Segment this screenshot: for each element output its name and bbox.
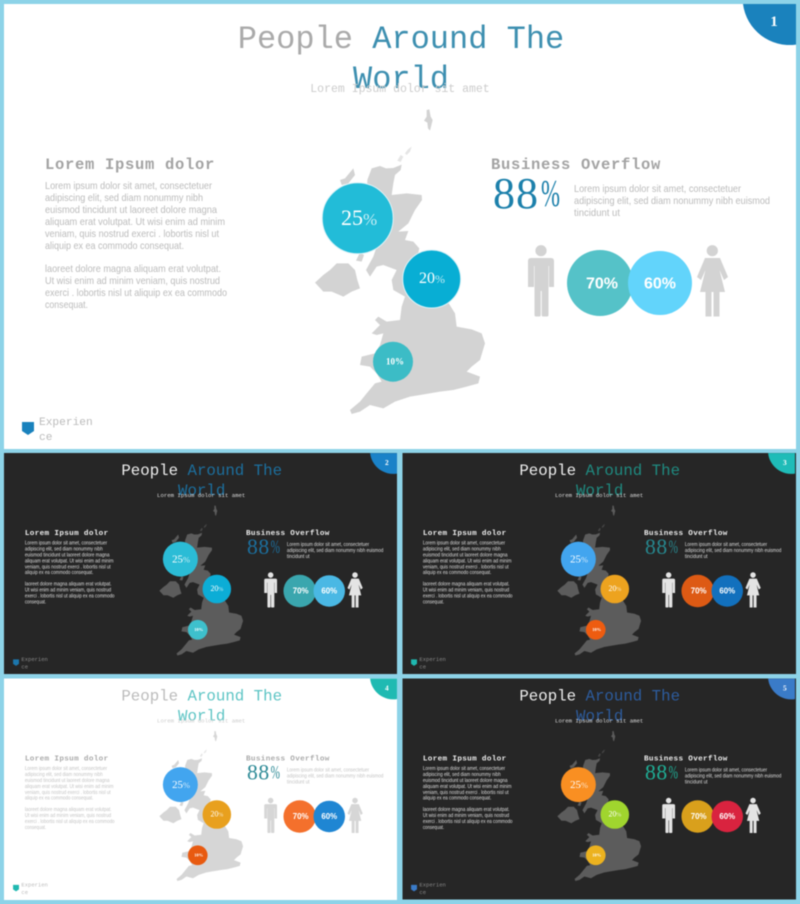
footer logo: ce	[39, 432, 52, 444]
circle: 60%	[313, 801, 345, 832]
icon: man	[264, 798, 277, 833]
circle: 25%: 25%	[570, 553, 588, 565]
circle: 10%: 10%	[386, 356, 404, 366]
left body text: adipiscing elit, sed diam nonummy nibh	[423, 772, 501, 778]
right body text: Lorem ipsum dolor sit amet, consectetuer	[287, 542, 369, 548]
title: World	[576, 707, 623, 725]
right body text	[574, 183, 770, 219]
stat: 88%: %	[271, 537, 280, 558]
circle: 25%: 25%	[172, 553, 190, 565]
circle: 60%: 60%	[719, 587, 735, 596]
left body text: euismod tincidunt ut laoreet dolore magna	[25, 778, 110, 784]
icon: woman	[745, 798, 761, 833]
circle: 25%	[163, 542, 198, 577]
circle: 25%	[561, 542, 596, 577]
stat: 88%: %	[669, 537, 678, 558]
circle: 60%	[628, 251, 692, 315]
map: UK	[159, 731, 243, 881]
icon: man	[528, 245, 554, 316]
left body text: adipiscing elit, sed diam nonummy nibh	[25, 772, 103, 778]
circle: 20%	[403, 250, 461, 308]
circle: 20%	[601, 800, 629, 829]
panel: slide 4	[4, 678, 397, 900]
right body text	[287, 542, 384, 560]
right body text	[685, 542, 782, 560]
right body text: adipiscing elit, sed diam nonummy nibh euismod	[685, 774, 782, 780]
page number tab	[370, 679, 397, 699]
right heading: Business Overflow	[644, 755, 728, 763]
left body text: Ut wisi enim ad minim veniam, quis nostrud	[423, 587, 509, 593]
circle: 20%: 20%	[609, 809, 621, 818]
circle: 10%	[586, 845, 606, 865]
title: People Around The	[238, 21, 564, 58]
circle: 60%: 60%	[321, 812, 337, 821]
left body text: euismod tincidunt ut laoreet dolore magna	[25, 553, 110, 559]
circle: 25%: 25%	[341, 205, 377, 230]
left body text: consequat.	[25, 825, 46, 831]
left heading: Lorem Ipsum dolor	[423, 755, 507, 763]
subtitle: Lorem Ipsum dolor sit amet	[157, 492, 245, 499]
icon: man	[264, 572, 277, 607]
stat: 88%	[247, 761, 280, 785]
stat: 88%: %	[271, 763, 280, 784]
left body text: Lorem ipsum dolor sit amet, consectetuer	[423, 541, 505, 547]
right body text: tincidunt ut	[685, 779, 708, 785]
left body text: aliquam erat volutpat. Ut wisi enim ad minim	[423, 784, 512, 790]
circle: 60%: 60%	[644, 276, 676, 292]
right body text: adipiscing elit, sed diam nonummy nibh euismod	[287, 774, 384, 780]
left body text: consequat.	[423, 599, 444, 605]
right heading: Business Overflow	[644, 530, 728, 538]
subtitle: Lorem Ipsum dolor sit amet	[157, 717, 245, 724]
right heading: Business Overflow	[246, 755, 330, 763]
circle: 10%: 10%	[592, 853, 601, 858]
left body text: Lorem ipsum dolor sit amet, consectetuer	[25, 766, 107, 772]
right body text	[685, 768, 782, 785]
panel: slide 1	[4, 4, 796, 449]
map: UK	[557, 505, 641, 655]
left body text	[25, 541, 115, 605]
right body text: tincidunt ut	[574, 207, 620, 219]
left body text: veniam, quis nostrud exerci . lobortis nisl ut	[423, 564, 509, 570]
icon: woman	[347, 572, 363, 607]
stat: 88%	[493, 169, 560, 218]
left body text: Ut wisi enim ad minim veniam, quis nostrud	[25, 813, 111, 819]
left heading: Lorem Ipsum dolor	[25, 530, 109, 538]
left body text: aliquam erat volutpat. Ut wisi enim ad minim	[25, 558, 114, 564]
left body text: aliquam erat volutpat. Ut wisi enim ad minim	[45, 216, 225, 228]
circle: 25%	[322, 183, 393, 254]
panel: slide 2	[4, 453, 397, 674]
left body text: exerci . lobortis nisl ut aliquip ex ea commodo	[423, 593, 513, 599]
page number tab	[768, 679, 795, 699]
title: World	[353, 61, 449, 98]
footer logo	[13, 656, 48, 670]
footer logo: ce	[21, 663, 28, 670]
circle: 70%: 70%	[691, 587, 707, 596]
footer logo: Experien	[39, 417, 93, 429]
circle: 20%: 20%	[609, 584, 621, 593]
page number tab: 5	[783, 683, 787, 692]
circle: 10%: 10%	[194, 853, 203, 858]
footer logo: Experien	[419, 656, 446, 663]
left body text: laoreet dolore magna aliquam erat volutpat.	[45, 263, 221, 275]
page number tab: 4	[385, 683, 389, 692]
left body text: laoreet dolore magna aliquam erat volutpat.	[25, 807, 112, 813]
panel: slide 3	[402, 453, 796, 674]
left body text: adipiscing elit, sed diam nonummy nibh	[25, 547, 103, 553]
page number tab: 3	[783, 458, 787, 467]
right body text: Lorem ipsum dolor sit amet, consectetuer	[287, 768, 369, 774]
circle: 20%: 20%	[211, 584, 223, 593]
circle: 70%	[681, 800, 714, 833]
circle: 70%: 70%	[586, 276, 618, 292]
circle: 70%	[567, 250, 633, 316]
stat: 88%: %	[669, 763, 678, 784]
footer logo: Experien	[419, 881, 446, 888]
circle: 70%: 70%	[293, 587, 309, 596]
footer logo: Experien	[21, 656, 48, 663]
circle: 20%	[203, 800, 231, 829]
right body text: Lorem ipsum dolor sit amet, consectetuer	[574, 183, 741, 195]
map: UK	[159, 505, 243, 655]
right body text: tincidunt ut	[685, 554, 708, 560]
icon: man	[662, 798, 675, 833]
left body text	[423, 541, 513, 605]
circle: 20%	[601, 575, 629, 603]
stat: 88%: 88	[645, 761, 668, 785]
page number tab: 2	[385, 458, 389, 467]
right body text: tincidunt ut	[287, 554, 310, 560]
left body text: adipiscing elit, sed diam nonummy nibh	[423, 547, 501, 553]
left body text: Lorem ipsum dolor sit amet, consectetuer	[423, 766, 505, 772]
left body text: adipiscing elit, sed diam nonummy nibh	[45, 192, 203, 204]
circle: 25%	[163, 767, 198, 802]
circle: 25%: 25%	[172, 779, 190, 791]
left body text: aliquip ex ea commodo consequat.	[45, 240, 184, 252]
right body text: Lorem ipsum dolor sit amet, consectetuer	[685, 768, 767, 774]
subtitle: Lorem Ipsum dolor sit amet	[555, 717, 643, 724]
page number tab: 1	[770, 14, 778, 30]
footer logo: ce	[21, 889, 28, 896]
footer logo	[411, 881, 446, 896]
left body text: consequat.	[25, 599, 46, 605]
left body text: Ut wisi enim ad minim veniam, quis nostrud	[25, 587, 111, 593]
map: UK	[315, 109, 485, 414]
left body text: aliquam erat volutpat. Ut wisi enim ad minim	[423, 558, 512, 564]
footer logo	[411, 656, 446, 670]
stat: 88%: %	[541, 173, 560, 215]
right body text: tincidunt ut	[287, 779, 310, 785]
circle: 70%: 70%	[691, 812, 707, 821]
left body text: aliquam erat volutpat. Ut wisi enim ad minim	[25, 784, 114, 790]
right body text: adipiscing elit, sed diam nonummy nibh euismod	[685, 548, 782, 554]
circle: 60%: 60%	[719, 812, 735, 821]
right body text: adipiscing elit, sed diam nonummy nibh euismod	[574, 195, 770, 207]
title: People Around The	[519, 688, 680, 706]
icon: woman	[697, 245, 728, 316]
circle: 20%: 20%	[211, 809, 223, 818]
stat: 88%: 88	[645, 535, 668, 559]
left body text: veniam, quis nostrud exerci . lobortis nisl ut	[25, 564, 111, 570]
circle: 70%: 70%	[293, 812, 309, 821]
left body text: veniam, quis nostrud exerci . lobortis nisl ut	[45, 228, 219, 240]
icon: woman	[745, 572, 761, 607]
circle: 20%: 20%	[419, 270, 445, 287]
circle: 10%: 10%	[194, 627, 203, 632]
right body text: Lorem ipsum dolor sit amet, consectetuer	[685, 542, 767, 548]
circle: 25%	[561, 767, 596, 802]
left body text: exerci . lobortis nisl ut aliquip ex ea commodo	[25, 819, 115, 825]
left body text	[25, 766, 115, 831]
footer logo	[22, 417, 93, 444]
left body text: aliquip ex ea commodo consequat.	[25, 570, 93, 576]
stat: 88%	[645, 535, 678, 559]
left heading: Lorem Ipsum dolor	[423, 530, 507, 538]
left body text: exerci . lobortis nisl ut aliquip ex ea commodo	[45, 287, 227, 299]
right heading: Business Overflow	[491, 156, 661, 174]
left body text: aliquip ex ea commodo consequat.	[423, 796, 491, 802]
stat: 88%: 88	[493, 169, 539, 218]
circle: 10%	[188, 620, 208, 640]
subtitle: Lorem Ipsum dolor sit amet	[310, 83, 490, 96]
left heading: Lorem Ipsum dolor	[45, 156, 215, 174]
circle: 60%	[313, 575, 345, 607]
left body text: Ut wisi enim ad minim veniam, quis nostrud	[45, 275, 220, 287]
title: World	[178, 482, 225, 500]
circle: 10%	[188, 845, 208, 865]
circle: 60%	[711, 801, 743, 832]
page number tab	[768, 453, 795, 474]
left body text: Lorem ipsum dolor sit amet, consectetuer	[25, 541, 107, 547]
right body text	[287, 768, 384, 785]
left heading: Lorem Ipsum dolor	[25, 755, 109, 763]
left body text: consequat.	[45, 299, 88, 311]
circle: 70%	[681, 575, 714, 607]
circle: 60%: 60%	[321, 587, 337, 596]
circle: 70%	[283, 800, 316, 833]
right body text: adipiscing elit, sed diam nonummy nibh euismod	[287, 548, 384, 554]
circle: 10%	[586, 620, 606, 640]
stat: 88%	[645, 761, 678, 785]
footer logo: ce	[419, 889, 426, 896]
left body text: exerci . lobortis nisl ut aliquip ex ea commodo	[423, 819, 513, 825]
circle: 20%	[203, 575, 231, 603]
page number tab	[743, 4, 796, 45]
title: People Around The	[121, 688, 282, 706]
left body text	[45, 180, 227, 311]
right heading: Business Overflow	[246, 530, 330, 538]
left body text: laoreet dolore magna aliquam erat volutpat.	[423, 582, 510, 588]
circle: 10%	[373, 342, 413, 382]
footer logo: ce	[419, 663, 426, 670]
left body text: Lorem ipsum dolor sit amet, consectetuer	[45, 180, 212, 192]
panel: slide 5	[402, 678, 796, 900]
icon: man	[662, 572, 675, 607]
map: UK	[557, 731, 641, 881]
left body text: Ut wisi enim ad minim veniam, quis nostrud	[423, 813, 509, 819]
left body text: veniam, quis nostrud exerci . lobortis nisl ut	[423, 790, 509, 796]
left body text: consequat.	[423, 825, 444, 831]
title: People Around The	[121, 462, 282, 480]
footer logo	[13, 881, 48, 896]
stat: 88%: 88	[247, 535, 270, 559]
circle: 70%	[283, 575, 316, 607]
stat: 88%	[247, 535, 280, 559]
left body text: laoreet dolore magna aliquam erat volutpat.	[25, 582, 112, 588]
stat: 88%: 88	[247, 761, 270, 785]
left body text: veniam, quis nostrud exerci . lobortis nisl ut	[25, 790, 111, 796]
circle: 25%: 25%	[570, 779, 588, 791]
left body text: euismod tincidunt ut laoreet dolore magna	[423, 553, 508, 559]
title: People Around The	[519, 462, 680, 480]
footer logo: Experien	[21, 881, 48, 888]
left body text: euismod tincidunt ut laoreet dolore magna	[423, 778, 508, 784]
page number tab	[370, 453, 397, 474]
circle: 60%	[711, 575, 743, 607]
left body text: aliquip ex ea commodo consequat.	[423, 570, 491, 576]
left body text: laoreet dolore magna aliquam erat volutpat.	[423, 807, 510, 813]
subtitle: Lorem Ipsum dolor sit amet	[555, 492, 643, 499]
icon: woman	[347, 798, 363, 833]
left body text: euismod tincidunt ut laoreet dolore magna	[45, 204, 217, 216]
title: World	[178, 707, 225, 725]
circle: 10%: 10%	[592, 627, 601, 632]
left body text: exerci . lobortis nisl ut aliquip ex ea commodo	[25, 593, 115, 599]
left body text: aliquip ex ea commodo consequat.	[25, 796, 93, 802]
title: World	[576, 482, 623, 500]
left body text	[423, 766, 513, 831]
